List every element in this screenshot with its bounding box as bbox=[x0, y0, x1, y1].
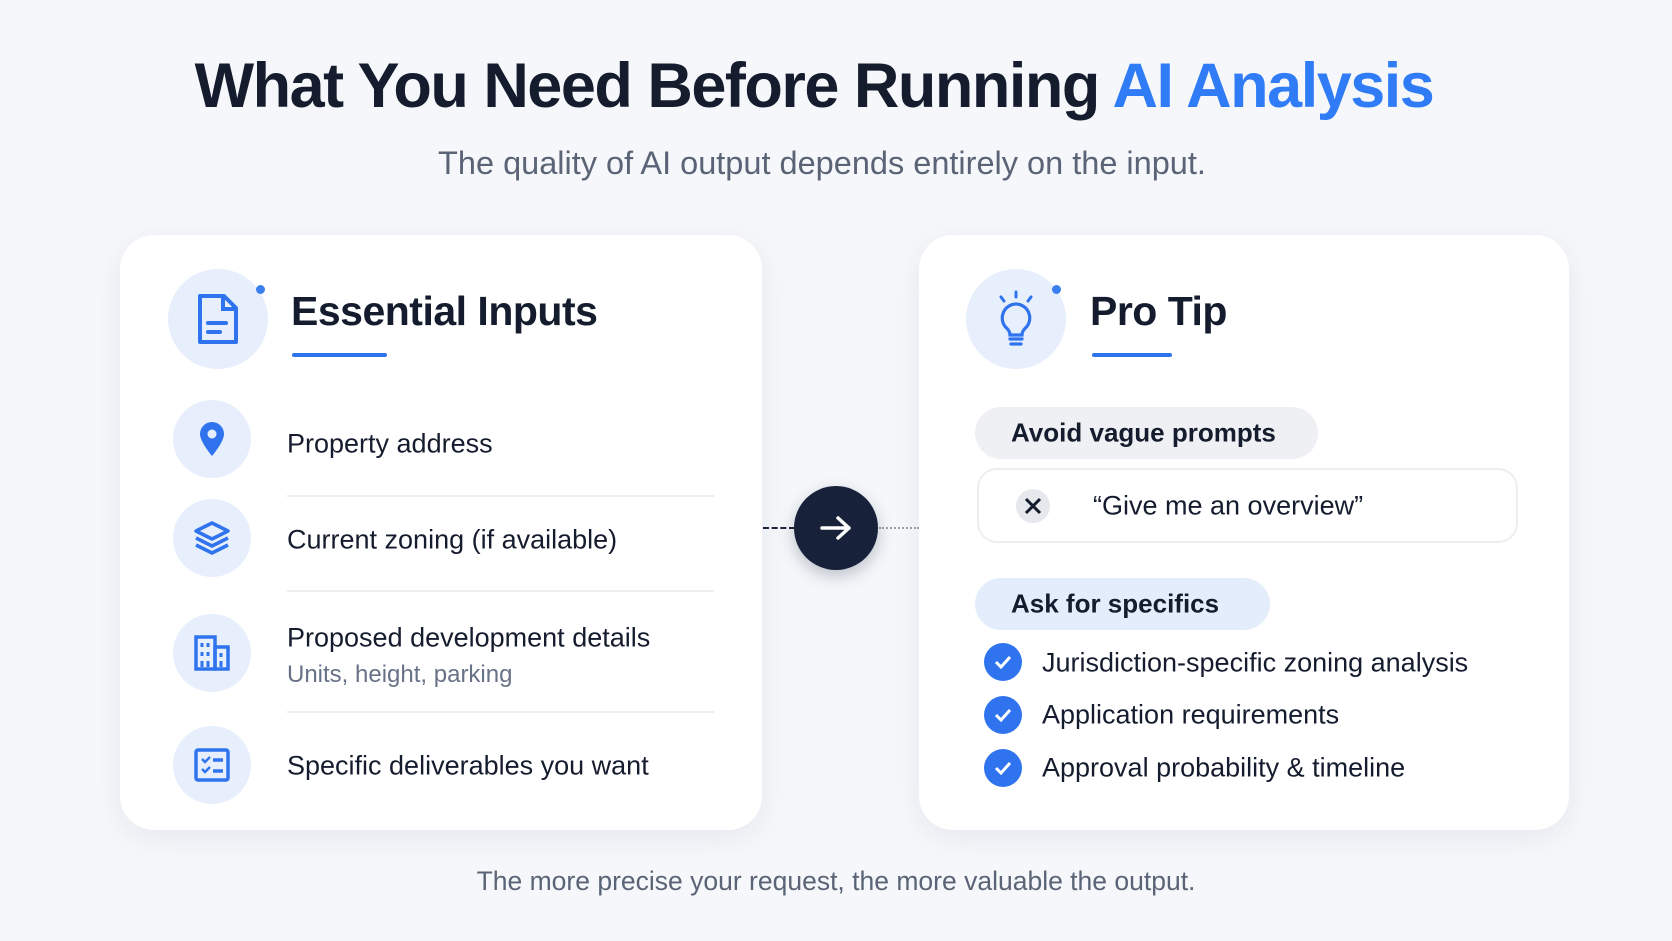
item: deliverables: Specific deliverables you want bbox=[287, 750, 649, 780]
pill: avoid vague prompts: Avoid vague prompts bbox=[1011, 418, 1276, 448]
heading: Pro Tip: Pro Tip bbox=[1090, 288, 1227, 334]
icon: document bbox=[168, 269, 268, 369]
item: proposed development bbox=[173, 614, 650, 692]
icon: x bbox=[1016, 489, 1050, 523]
checklist bbox=[984, 643, 1468, 787]
pill: ask for specifics bbox=[975, 578, 1270, 630]
item: property address: Property address bbox=[287, 428, 493, 458]
pill: avoid vague prompts bbox=[975, 407, 1318, 459]
footer text: The more precise your request, the more valuable the output. bbox=[477, 866, 1195, 896]
item: deliverables bbox=[173, 726, 649, 804]
checklist: Application requirements bbox=[1042, 700, 1339, 730]
checklist: Approval probability & timeline bbox=[1042, 752, 1405, 782]
title: What You Need Before Running AI Analysis bbox=[195, 51, 1433, 121]
icon: lightbulb bbox=[966, 269, 1066, 369]
icon: arrow circle bbox=[794, 486, 878, 570]
item: current zoning bbox=[173, 499, 617, 577]
panel: pro tip bbox=[919, 235, 1569, 830]
item: proposed development: Proposed development details bbox=[287, 622, 650, 652]
quote box: “Give me an overview” bbox=[1093, 490, 1363, 520]
item: property address bbox=[173, 400, 493, 478]
subtitle: The quality of AI output depends entirely on the input. bbox=[438, 145, 1206, 181]
item: current zoning: Current zoning (if available) bbox=[287, 524, 617, 554]
checklist: Jurisdiction-specific zoning analysis bbox=[1042, 648, 1468, 678]
heading: Essential Inputs: Essential Inputs bbox=[291, 288, 597, 334]
arrow connector bbox=[763, 484, 919, 584]
panel: essential inputs bbox=[120, 235, 762, 830]
quote box bbox=[977, 468, 1518, 543]
item: proposed development: Units, height, parking bbox=[287, 661, 512, 688]
pill: ask for specifics: Ask for specifics bbox=[1011, 588, 1219, 618]
